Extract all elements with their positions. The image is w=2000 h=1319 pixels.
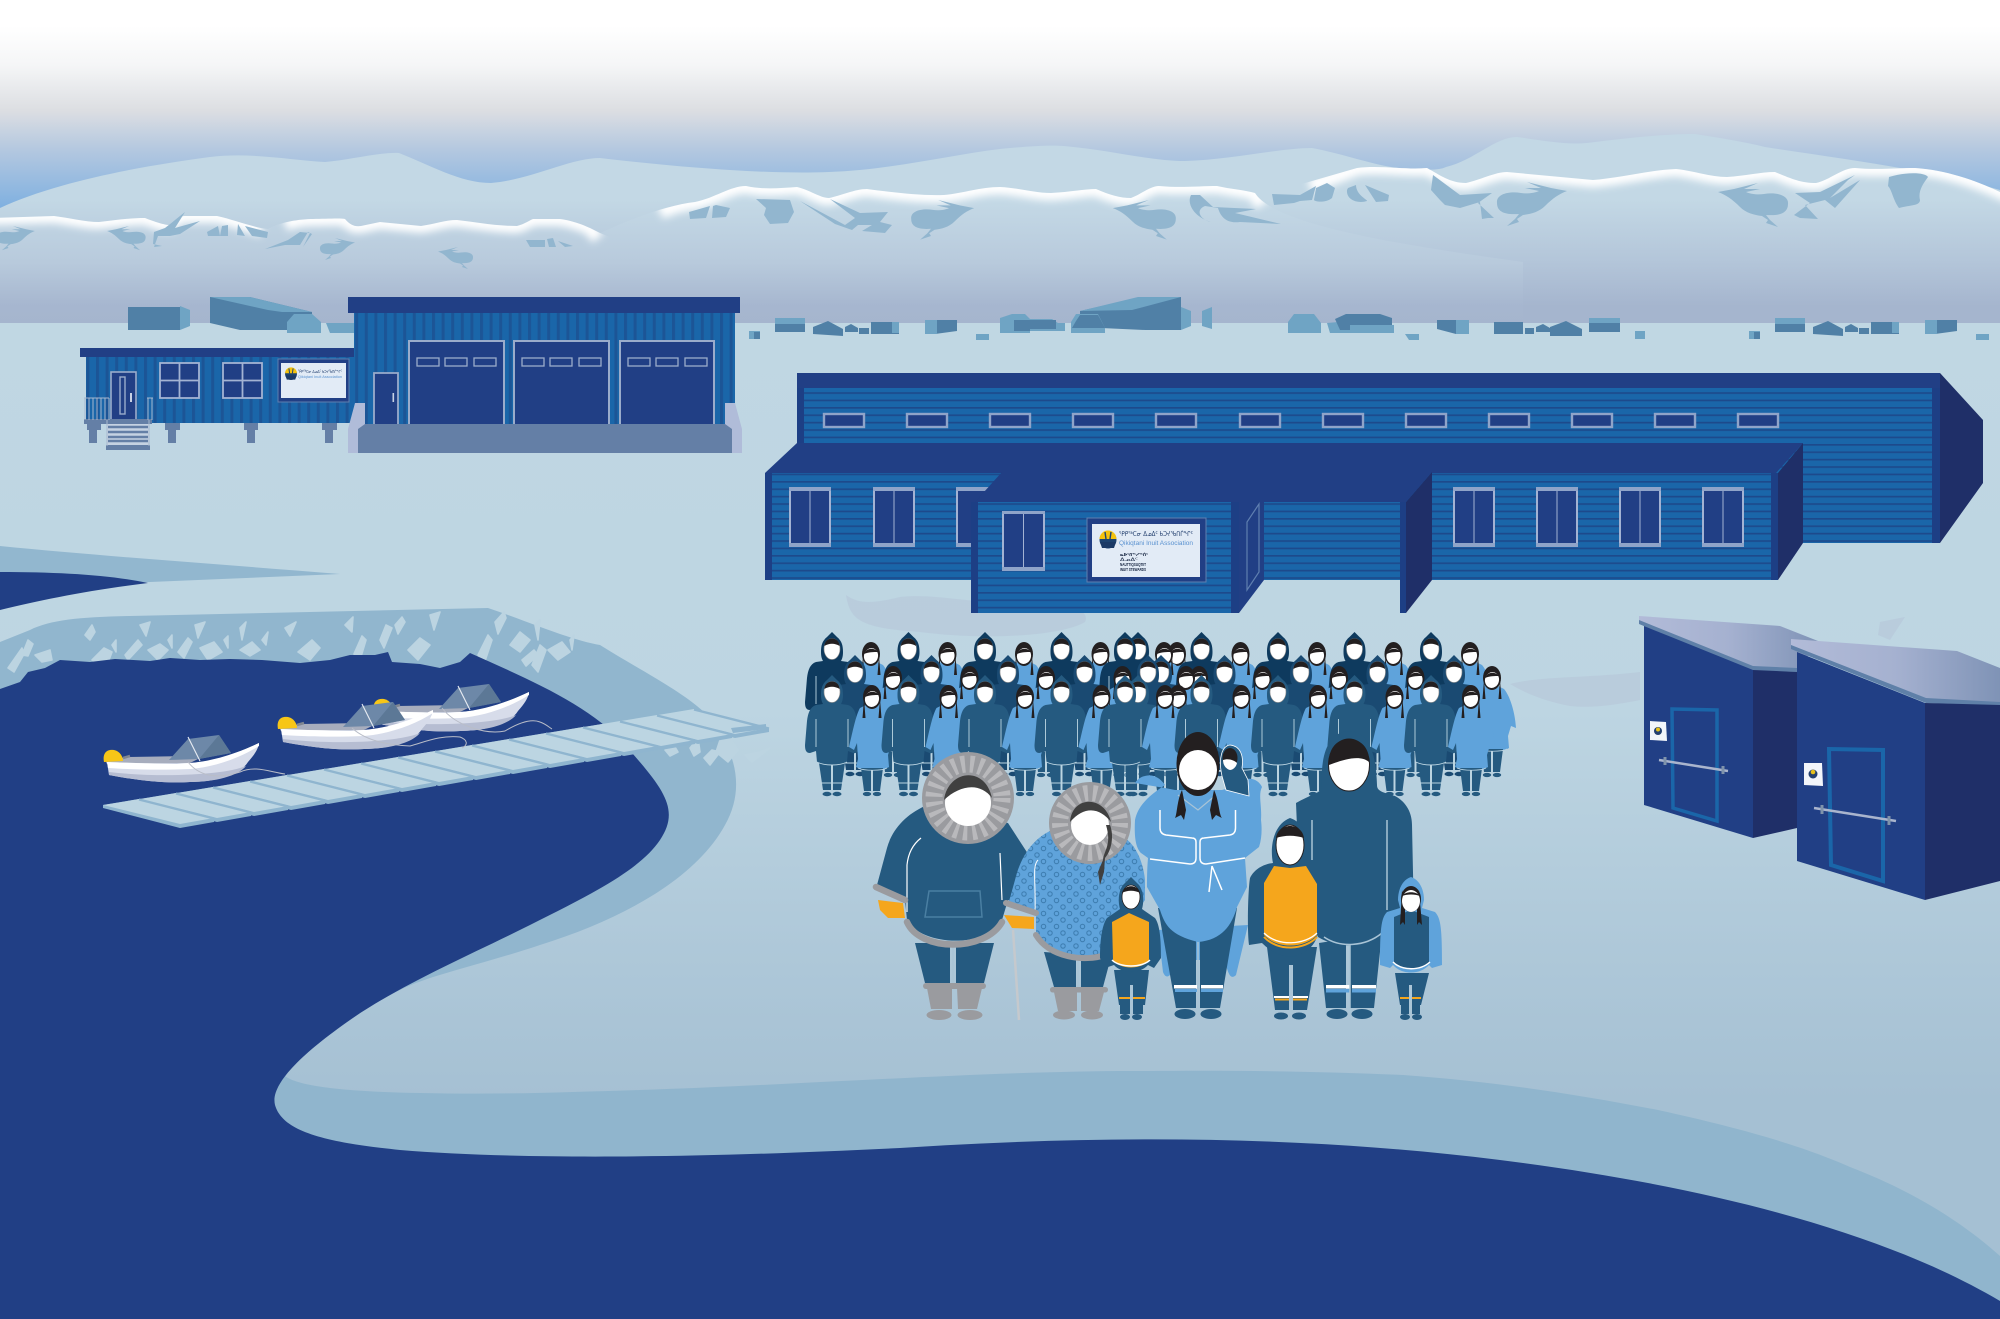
elder's mitten — [878, 900, 905, 918]
shoreline ice band — [0, 608, 736, 1000]
figure: older child in orange — [1248, 818, 1317, 1020]
older child's legs — [1267, 947, 1317, 1010]
shed side wall — [1925, 703, 2000, 900]
inlet: dark water wedge — [0, 572, 148, 610]
elder's boots — [923, 983, 986, 1020]
elder's face and hair — [945, 780, 991, 826]
crowd of community members — [805, 632, 1516, 796]
entrance sign: ᕿᑭᖅᑕᓂ ᐃᓄᐃᑦ ᑲᑐᔪᖃᑎᒌᖏᑦ — [1119, 530, 1193, 538]
rear small windows — [824, 414, 1778, 427]
garage small door — [374, 373, 398, 424]
shed lock bar — [1659, 757, 1728, 774]
child's legs — [1114, 970, 1149, 1005]
ice flakes on shore — [8, 612, 770, 765]
woman's boots — [1050, 987, 1108, 1020]
office building: small blue building — [80, 348, 360, 450]
garage doors — [409, 341, 714, 424]
mountain range: middle with snow — [655, 186, 1268, 222]
office roof — [80, 348, 360, 357]
older child's face — [1276, 825, 1304, 865]
amauti tail — [1158, 925, 1248, 977]
floating dock — [103, 709, 769, 828]
garage building — [348, 297, 742, 453]
front wing side — [1778, 443, 1803, 580]
woman's fur trim — [1006, 903, 1105, 958]
inlet: shallow ice strip — [0, 546, 340, 600]
elder's fur trim — [876, 887, 1002, 944]
cane — [1013, 930, 1019, 1020]
garage wall — [354, 313, 735, 424]
blue child's legs — [1395, 973, 1429, 1005]
storage shed: right — [1791, 639, 2000, 900]
office sign — [278, 359, 349, 402]
vestibule wall — [971, 502, 1239, 613]
entrance sign: ᐃᓄᐃᑦ — [1120, 558, 1138, 563]
storage shed: left — [1639, 616, 1818, 838]
mother's parka — [1135, 775, 1262, 942]
entrance sign: ᓇᐅᑦᑎᖅᓱᖅᑏᑦ — [1120, 552, 1148, 558]
mother's legs — [1158, 908, 1237, 1008]
faint ice shadows — [846, 595, 1905, 707]
elder's legs — [915, 943, 994, 983]
front wing wall — [765, 473, 1778, 580]
garage roof — [348, 297, 740, 313]
father's face and hair — [1328, 739, 1370, 791]
figure: mother with baby in amauti — [1135, 732, 1262, 1019]
child's parka — [1100, 877, 1161, 972]
main building: rear long wing — [797, 373, 1983, 543]
mother's hair and braids — [1176, 732, 1220, 796]
ground: snow and ice — [0, 323, 2000, 1319]
main building: front wing — [765, 443, 1803, 580]
figure: woman with patterned parka and cane — [1004, 782, 1145, 1020]
garage ramp — [348, 403, 742, 453]
sky background — [0, 0, 2000, 330]
side door — [1239, 502, 1264, 613]
figure: father — [1296, 731, 1414, 1019]
rear side wall — [1940, 373, 1983, 543]
office wall — [86, 357, 360, 423]
rear roof — [797, 373, 1940, 388]
woman's patterned parka — [1008, 830, 1145, 957]
figure: elder with fur hood — [876, 752, 1032, 1020]
boat: near — [104, 735, 285, 783]
child's face — [1122, 885, 1140, 909]
shed front wall — [1644, 626, 1753, 838]
woman's mitten — [1004, 915, 1034, 929]
mountain rock markings — [0, 173, 1928, 269]
elder's parka — [877, 806, 1032, 941]
lower shore ice band — [260, 1071, 2000, 1319]
vestibule window — [1002, 511, 1045, 571]
front wing tall windows — [790, 489, 1743, 545]
boat: far — [374, 684, 552, 732]
baby in hood — [1220, 745, 1249, 796]
rear wall — [797, 388, 1940, 543]
office door — [111, 372, 136, 420]
elder's pocket — [925, 891, 982, 917]
shed lock bar — [1814, 805, 1896, 825]
older child's parka — [1248, 818, 1317, 957]
office stairs and railing — [84, 398, 153, 450]
entrance sign — [1087, 518, 1206, 582]
boat: middle — [278, 702, 466, 750]
mountain range: right with snow — [1305, 167, 2000, 204]
father's legs — [1319, 933, 1382, 1008]
father's parka and hood — [1296, 731, 1414, 946]
figure: child in orange, small — [1100, 877, 1161, 1020]
elder's fur hood — [922, 752, 1014, 844]
distant town and icebergs — [128, 297, 1989, 340]
shed roof — [1639, 616, 1818, 672]
entrance sign: Qikiqtani Inuit Association — [1119, 540, 1193, 547]
shed front wall — [1797, 652, 1925, 900]
figure: child in blue hood with braids — [1380, 877, 1442, 1020]
shed roof — [1791, 639, 2000, 705]
office windows — [160, 363, 262, 398]
window sills — [789, 487, 1744, 547]
woman's braid — [1098, 825, 1112, 885]
blue child's hair and face — [1400, 890, 1422, 925]
recess side — [1406, 472, 1432, 613]
woman's face and hair — [1071, 805, 1109, 845]
main building: entrance vestibule — [971, 472, 1432, 613]
blue child's parka — [1380, 877, 1442, 972]
office sign: ᕿᑭᖅᑕᓂ ᐃᓄᐃᑦ ᑲᑐᔪᖃᑎᒌᖏᑦ — [298, 369, 342, 374]
shed door — [1672, 709, 1717, 821]
back mountain ridge — [0, 134, 2000, 330]
woman's fur hood — [1049, 782, 1131, 864]
shed sign — [1804, 763, 1823, 786]
woman's legs — [1044, 952, 1111, 987]
vestibule roof — [975, 472, 1432, 502]
shed door — [1829, 749, 1883, 881]
right recess wall — [1264, 502, 1400, 580]
mountain range: left with snow — [0, 216, 605, 246]
entrance sign: INUIT STEWARDS — [1120, 567, 1146, 572]
office sign: Qikiqtani Inuit Association — [298, 374, 342, 379]
entrance sign: NAUTTIQSUQTIIT — [1120, 562, 1146, 567]
office platform and posts — [84, 419, 337, 443]
shed sign — [1650, 721, 1667, 741]
sea water — [0, 652, 2000, 1319]
shed side wall — [1753, 670, 1797, 838]
elder's seams — [907, 838, 1002, 912]
front wing roof — [765, 443, 1803, 473]
